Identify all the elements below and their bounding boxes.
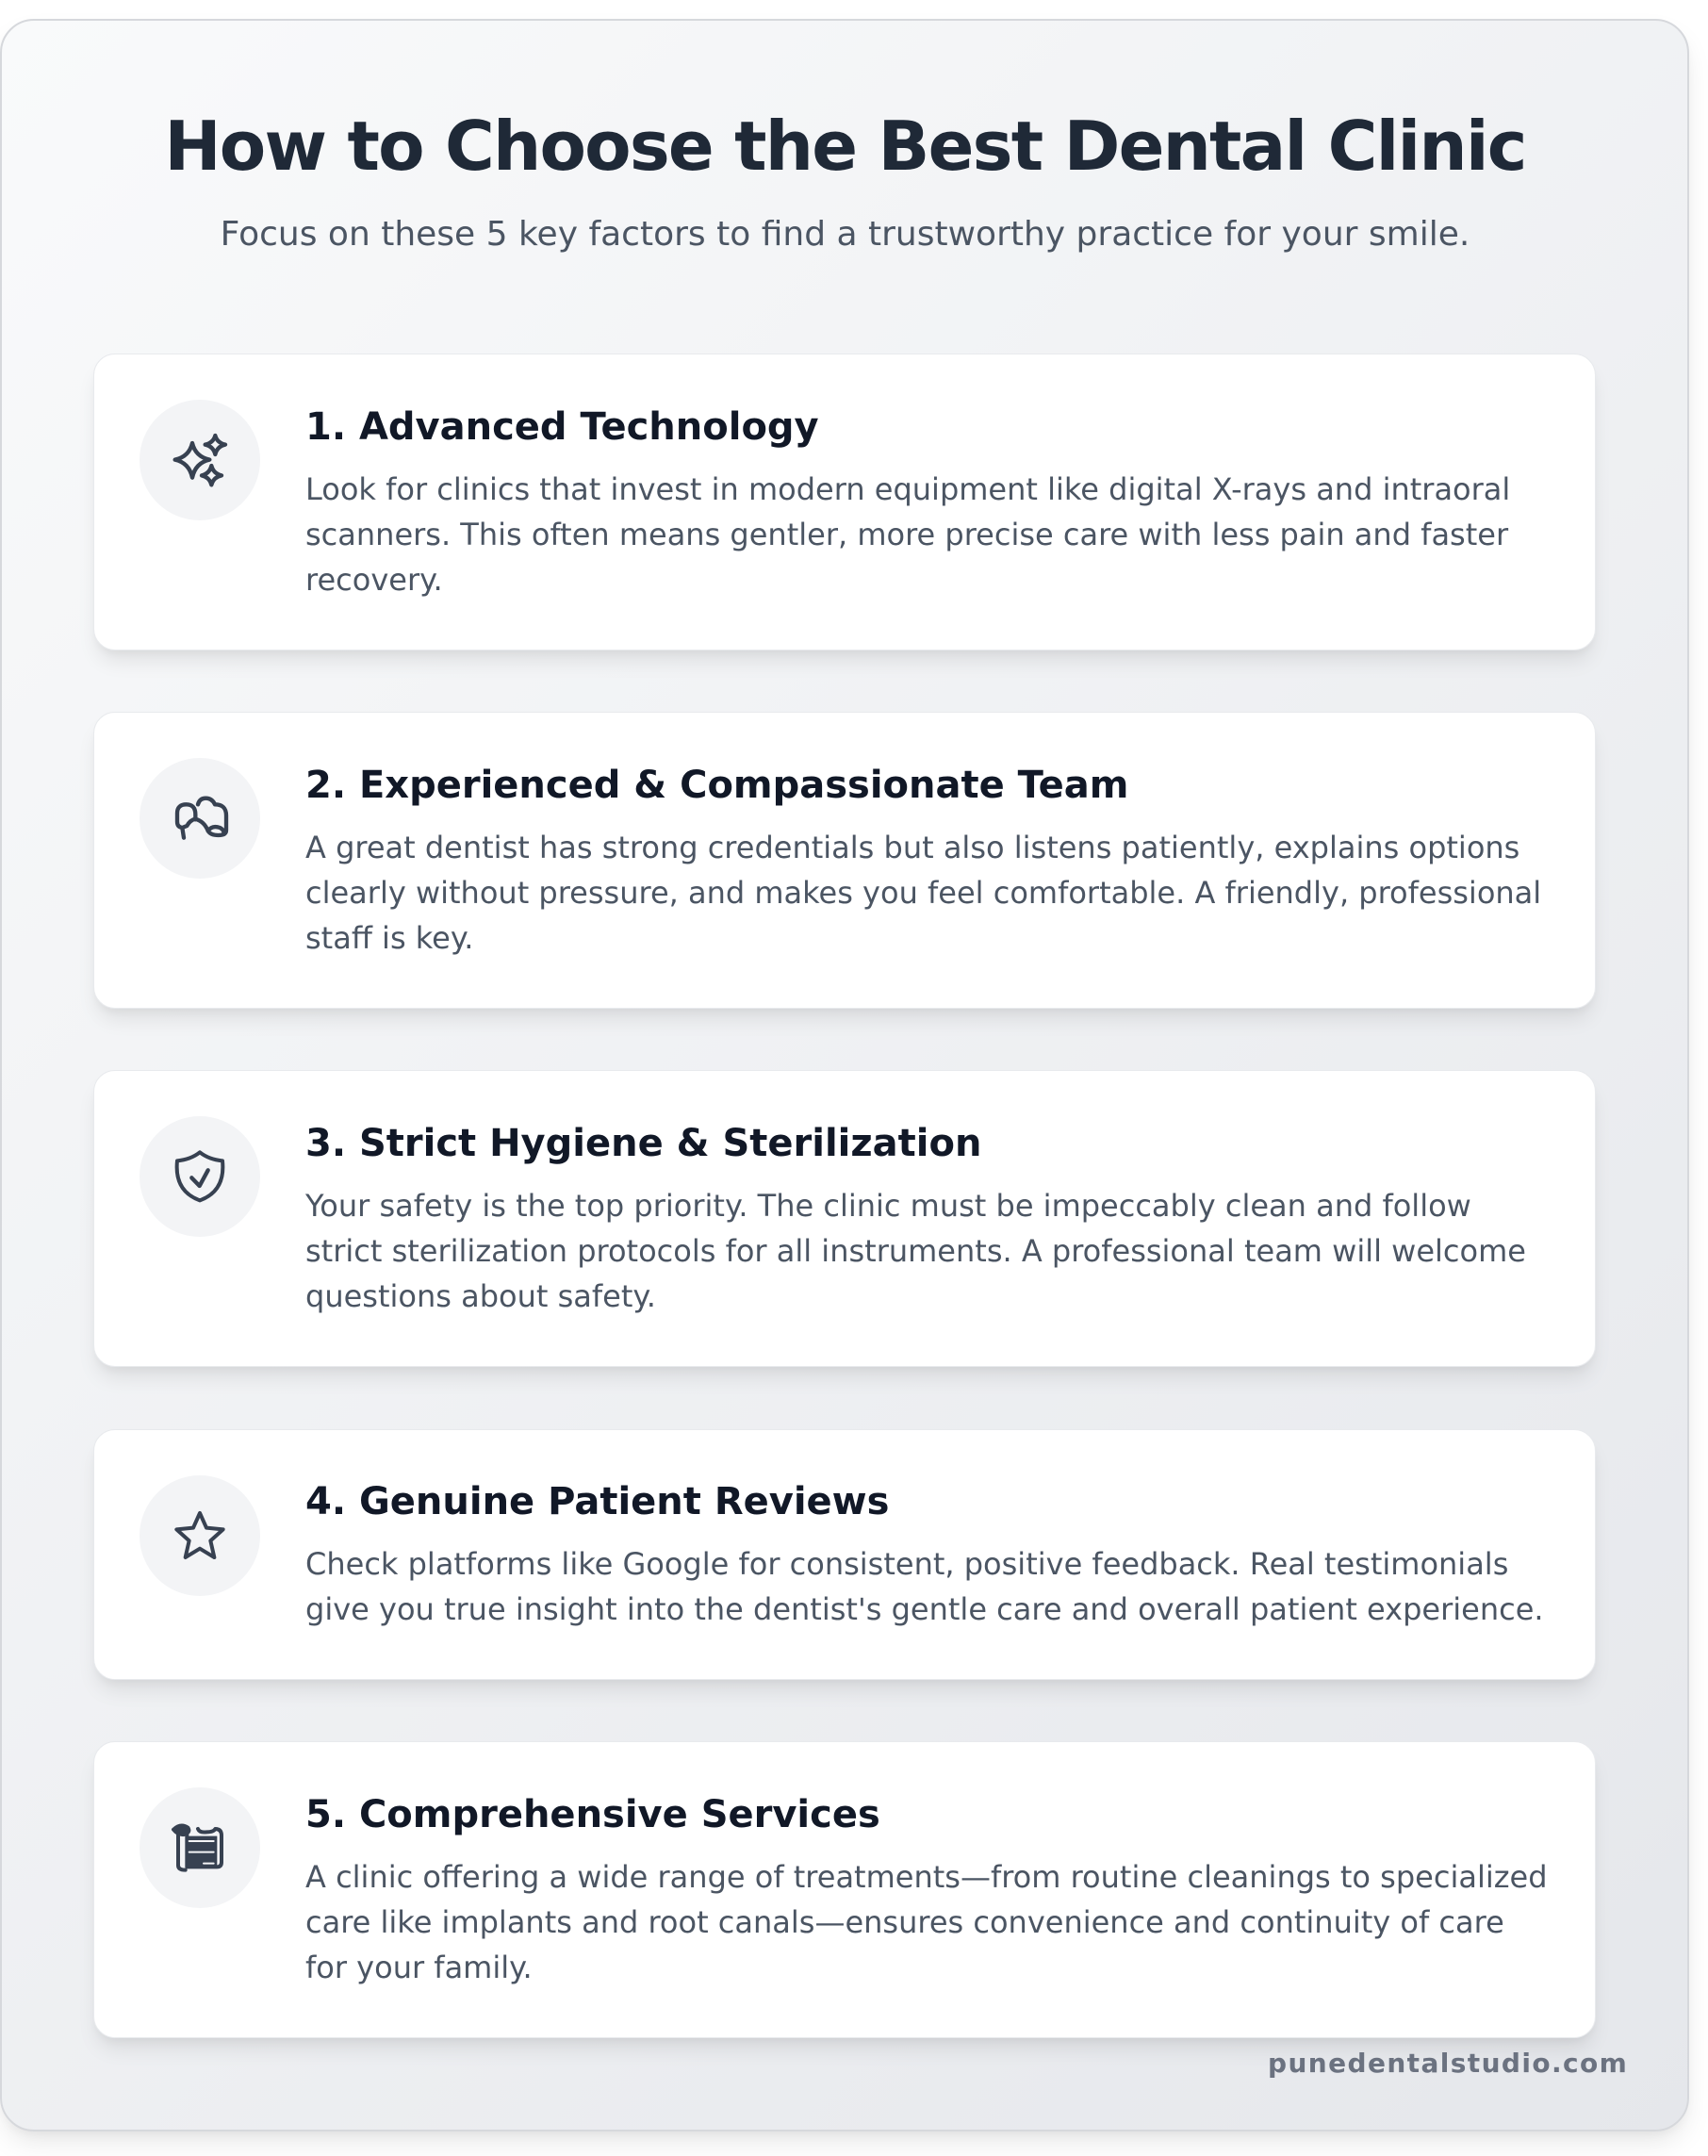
body text xyxy=(305,1546,1544,1627)
panel: card 2 experienced team xyxy=(93,712,1596,1009)
heading: 3. Strict Hygiene & Sterilization xyxy=(305,1122,981,1165)
body text: clearly without pressure, and makes you feel comfortable. A friendly, professional xyxy=(305,875,1541,911)
body text: scanners. This often means gentler, more precise care with less pain and faster xyxy=(305,517,1508,552)
body text: care like implants and root canals—ensures convenience and continuity of care xyxy=(305,1904,1504,1940)
body text: recovery. xyxy=(305,562,443,598)
body text: Check platforms like Google for consistent, positive feedback. Real testimonials xyxy=(305,1546,1508,1582)
panel: card 3 hygiene xyxy=(93,1070,1596,1367)
body text: A great dentist has strong credentials but also listens patiently, explains options xyxy=(305,830,1519,865)
body text xyxy=(305,471,1510,598)
body text: for your family. xyxy=(305,1950,533,1985)
panel: card 1 advanced technology xyxy=(93,354,1596,650)
title: How to Choose the Best Dental Clinic xyxy=(164,107,1526,186)
body text: give you true insight into the dentist's gentle care and overall patient experience. xyxy=(305,1591,1544,1627)
heading: 1. Advanced Technology xyxy=(305,405,819,449)
icon: star xyxy=(140,1475,260,1596)
icon: scroll xyxy=(140,1787,260,1908)
body text: strict sterilization protocols for all instruments. A professional team will welcome xyxy=(305,1233,1526,1269)
body text xyxy=(305,1859,1548,1985)
body text: Your safety is the top priority. The clinic must be impeccably clean and follow xyxy=(305,1188,1471,1224)
icon: sparkles xyxy=(140,400,260,520)
body text: staff is key. xyxy=(305,920,473,956)
body text: A clinic offering a wide range of treatments—from routine cleanings to specialized xyxy=(305,1859,1548,1895)
body text xyxy=(305,830,1541,956)
heading: 2. Experienced & Compassionate Team xyxy=(305,764,1128,807)
icon: shield check xyxy=(140,1116,260,1237)
footer website: punedentalstudio.com xyxy=(1268,2048,1628,2079)
body text: Look for clinics that invest in modern equipment like digital X-rays and intraoral xyxy=(305,471,1510,507)
panel: card 5 services xyxy=(93,1741,1596,2038)
icon: teeth xyxy=(140,758,260,879)
subtitle: Focus on these 5 key factors to find a trustworthy practice for your smile. xyxy=(221,215,1470,254)
heading: 4. Genuine Patient Reviews xyxy=(305,1480,889,1523)
body text: questions about safety. xyxy=(305,1278,656,1314)
heading: 5. Comprehensive Services xyxy=(305,1793,880,1836)
panel: card 4 reviews xyxy=(93,1429,1596,1680)
body text xyxy=(305,1188,1526,1314)
